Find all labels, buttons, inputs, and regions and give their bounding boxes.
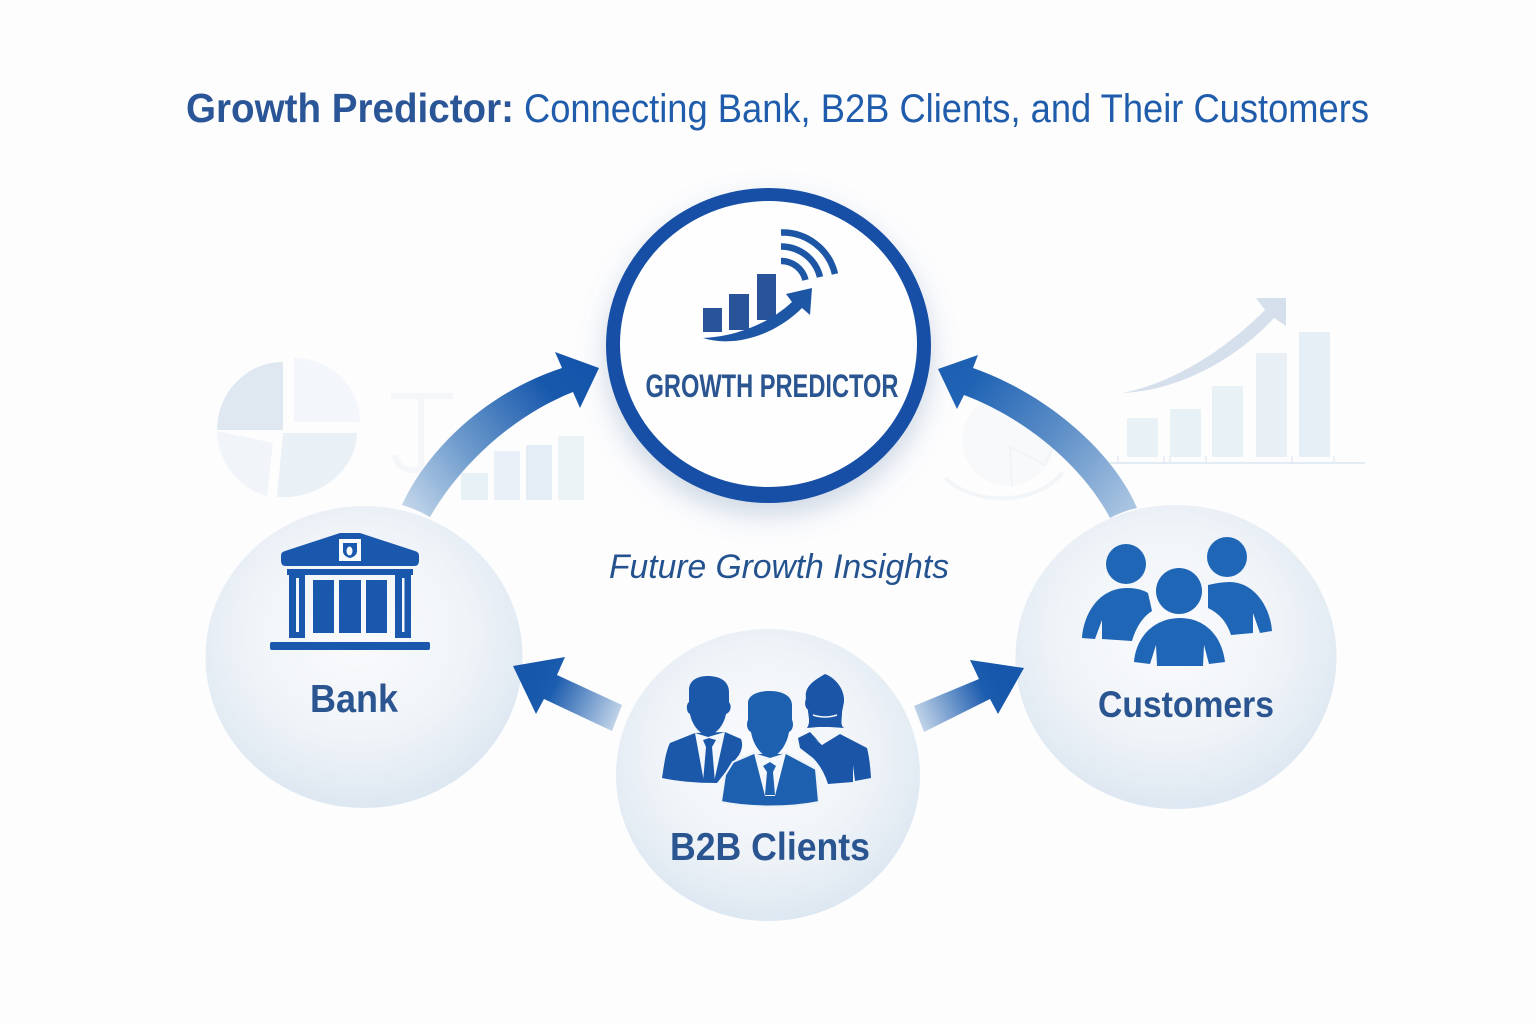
- customers label: Customers: [1098, 684, 1274, 725]
- icon: bank building: [270, 533, 430, 650]
- bank label: Bank: [310, 678, 398, 721]
- center caption: Future Growth Insights: [609, 548, 949, 586]
- icon: center man client: [721, 691, 819, 806]
- growth predictor hub: [606, 188, 931, 503]
- arrow: bank to predictor: [402, 352, 599, 517]
- title: Growth Predictor:: [186, 85, 514, 131]
- background gauge right: [945, 394, 1063, 498]
- background growth chart right: [1107, 298, 1365, 464]
- arrow: B2B clients to bank: [513, 657, 622, 731]
- arrow: customers to predictor: [938, 355, 1137, 518]
- title: Connecting Bank, B2B Clients, and Their Customers: [524, 87, 1369, 131]
- icon: growth chart with signal: [703, 232, 835, 341]
- arrow: B2B clients to customers: [914, 660, 1024, 732]
- node: customers: [1016, 505, 1336, 809]
- background pie chart: [217, 358, 360, 497]
- icon: woman client: [798, 674, 871, 784]
- node: bank: [206, 506, 522, 808]
- hub label: GROWTH PREDICTOR: [646, 368, 898, 404]
- icon: customers group: [1082, 537, 1272, 666]
- background bar chart left: [391, 396, 584, 500]
- icon: left man client: [662, 676, 742, 783]
- node: B2B clients: [616, 629, 920, 921]
- icon: business people: [662, 674, 871, 806]
- title: [186, 85, 1369, 131]
- B2B clients label: B2B Clients: [670, 826, 870, 869]
